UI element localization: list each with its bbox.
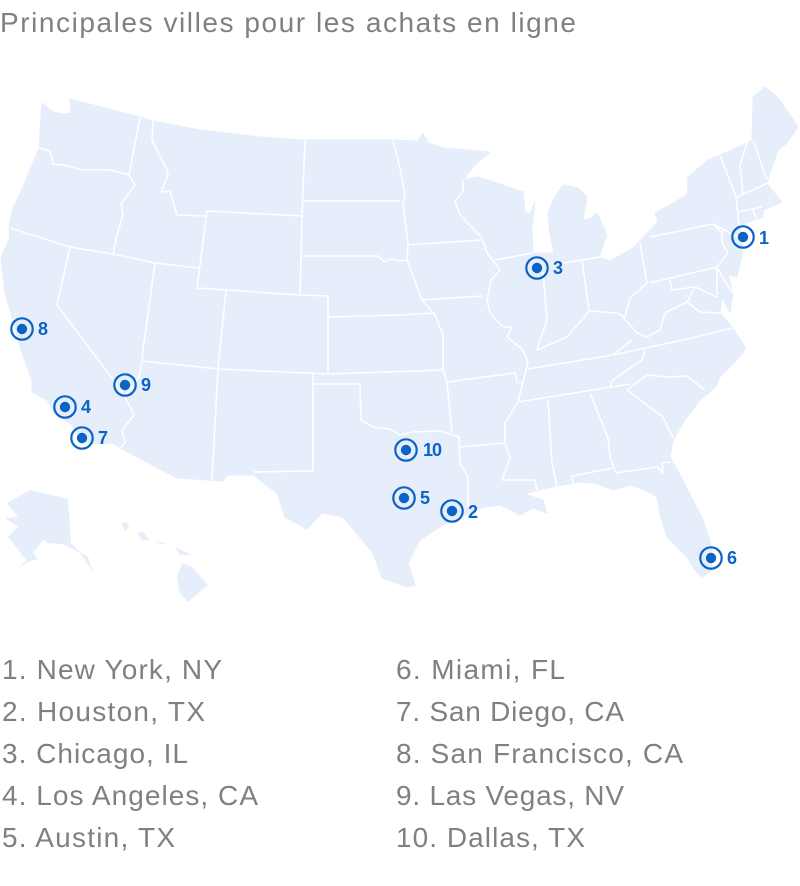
marker 2: Houston <box>441 500 478 522</box>
marker 4: Los Angeles <box>54 396 91 418</box>
marker 1: New York: 1 <box>759 228 769 248</box>
city list: right column: 8. San Francisco, CA <box>396 738 683 769</box>
city list: right column <box>396 654 683 853</box>
city list: left column: 1. New York, NY <box>2 654 222 685</box>
marker 9: Las Vegas <box>114 374 151 396</box>
marker 3: Chicago: 3 <box>553 258 563 278</box>
marker 10: Dallas <box>395 439 442 461</box>
marker 10: Dallas: 10 <box>423 440 442 460</box>
map of the United States <box>1 87 798 602</box>
marker 6: Miami <box>700 547 737 569</box>
marker 8: San Francisco <box>11 318 48 340</box>
marker 8: San Francisco: 8 <box>38 319 48 339</box>
marker 5: Austin <box>393 487 430 509</box>
city list: left column: 5. Austin, TX <box>2 822 175 853</box>
marker 3: Chicago <box>526 257 563 279</box>
title: Principales villes pour les achats en ligne <box>0 7 576 38</box>
city list: right column: 9. Las Vegas, NV <box>396 780 624 811</box>
Alaska <box>5 490 93 572</box>
marker 5: Austin: 5 <box>420 488 430 508</box>
marker 4: Los Angeles: 4 <box>81 397 91 417</box>
contiguous states landmass <box>1 87 798 587</box>
city list: left column: 3. Chicago, IL <box>2 738 188 769</box>
marker 7: San Diego: 7 <box>98 428 108 448</box>
marker 9: Las Vegas: 9 <box>141 375 151 395</box>
state borders <box>10 117 768 507</box>
Hawaii <box>121 522 208 602</box>
marker 1: New York <box>732 226 769 248</box>
city list: right column: 6. Miami, FL <box>396 654 565 685</box>
city list: right column: 10. Dallas, TX <box>396 822 585 853</box>
city list: right column: 7. San Diego, CA <box>396 696 624 727</box>
city list: left column: 4. Los Angeles, CA <box>2 780 258 811</box>
marker 2: Houston: 2 <box>468 502 478 522</box>
marker 6: Miami: 6 <box>727 548 737 568</box>
city list: left column: 2. Houston, TX <box>2 696 205 727</box>
marker 7: San Diego <box>71 427 108 449</box>
city list: left column <box>2 654 258 853</box>
